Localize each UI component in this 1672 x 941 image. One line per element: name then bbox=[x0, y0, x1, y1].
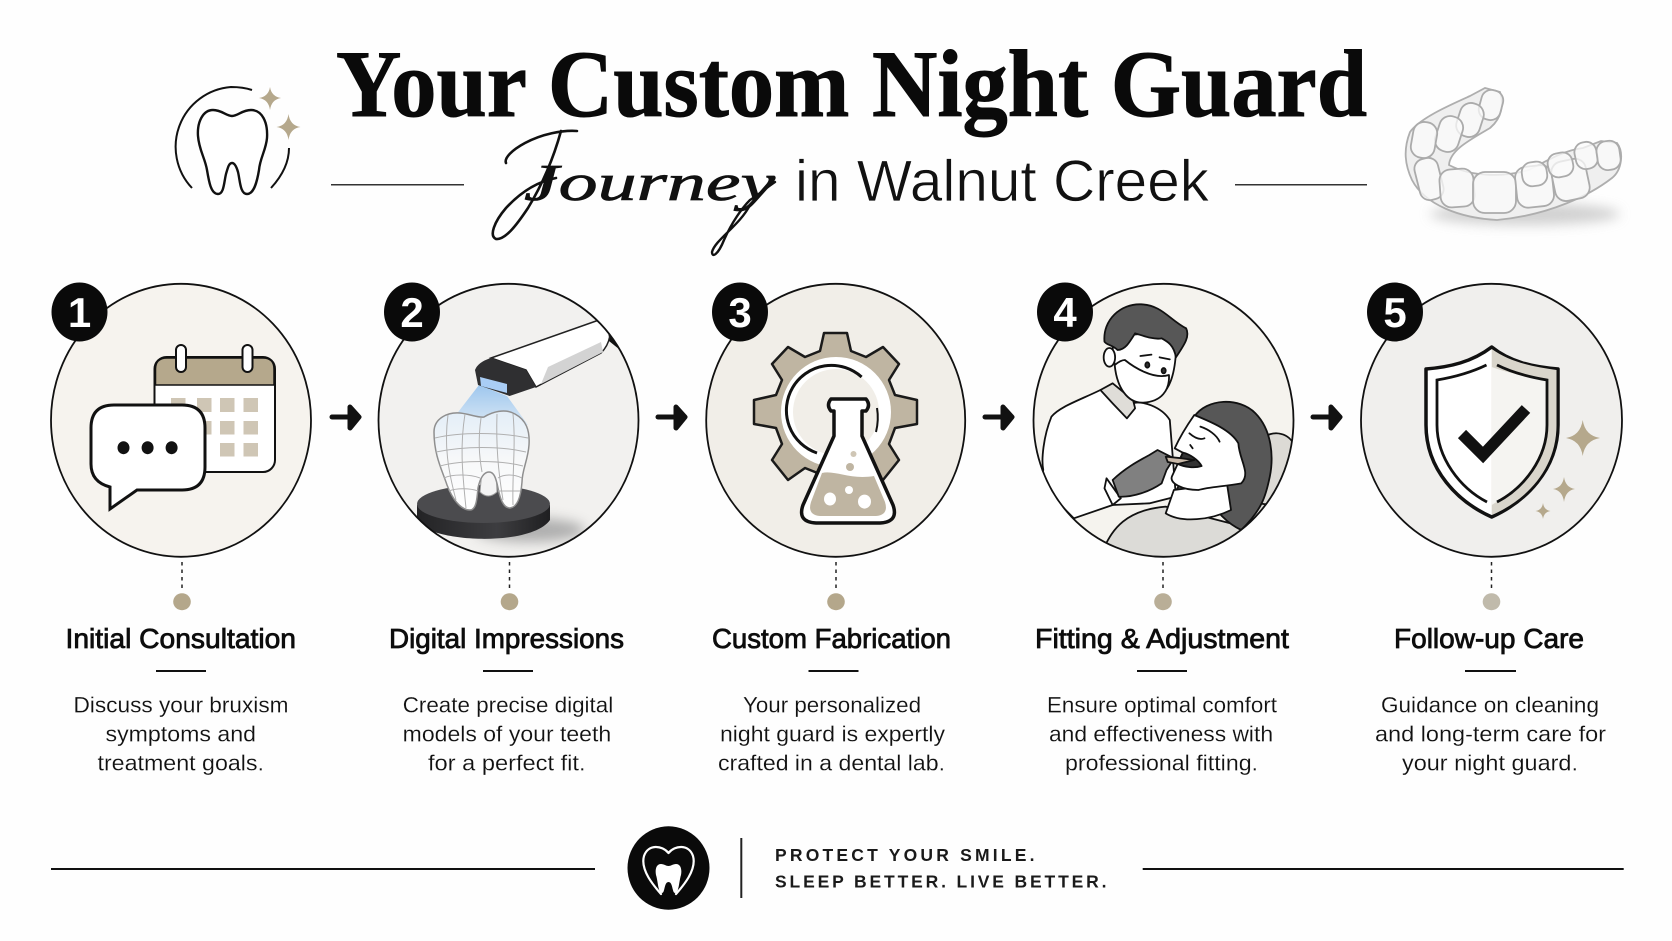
step 4 text bbox=[1035, 623, 1289, 776]
step 4 circle bbox=[1034, 284, 1294, 557]
arrow 3 bbox=[985, 407, 1012, 428]
description: step 3: Your personalized bbox=[743, 692, 921, 717]
description: step 1: Discuss your bruxism bbox=[74, 692, 288, 717]
step 2 text bbox=[389, 623, 624, 776]
step 2 circle outline bbox=[378, 284, 638, 557]
footer tagline bbox=[775, 845, 1106, 891]
step 2 badge: 2 bbox=[400, 289, 424, 336]
description: step 4: and effectiveness with bbox=[1049, 722, 1273, 747]
description: step 2: models of your teeth bbox=[403, 722, 611, 747]
description: step 5: and long-term care for bbox=[1375, 722, 1607, 747]
footer rule right bbox=[1143, 868, 1624, 870]
step 1 text bbox=[66, 623, 296, 776]
step 2 circle bbox=[378, 284, 638, 557]
description: step 5: your night guard. bbox=[1402, 751, 1578, 776]
description: step 4: Ensure optimal comfort bbox=[1047, 692, 1278, 717]
description: step 2 bbox=[403, 692, 613, 776]
step 1 badge: 1 bbox=[68, 289, 91, 336]
step 4 circle outline bbox=[1034, 284, 1294, 557]
step 2 panel bbox=[378, 282, 638, 557]
step 4 badge bbox=[1037, 282, 1093, 342]
description: step 3 bbox=[718, 692, 946, 776]
icon: flask bbox=[802, 399, 894, 523]
description: step 3: night guard is expertly bbox=[720, 722, 946, 747]
description: step 3: crafted in a dental lab. bbox=[718, 751, 945, 776]
subtitle rule left bbox=[331, 184, 464, 186]
description: step 4: professional fitting. bbox=[1065, 751, 1258, 776]
step 3 text bbox=[712, 623, 951, 776]
subtitle: Journey script word: Journey bbox=[524, 155, 776, 212]
icon: sparkles bbox=[1536, 420, 1600, 519]
step 5 text bbox=[1375, 623, 1607, 776]
subtitle: Journey script word bbox=[493, 131, 776, 255]
footer tagline: PROTECT YOUR SMILE. bbox=[775, 845, 1034, 865]
heading: Initial Consultation: Initial Consultation bbox=[66, 623, 296, 654]
icon: speech bubble bbox=[91, 405, 205, 509]
description: step 5 bbox=[1375, 692, 1607, 776]
footer rule left bbox=[51, 868, 595, 870]
heading: Digital Impressions: Digital Impressions bbox=[389, 623, 624, 654]
footer divider bbox=[740, 838, 742, 898]
step 1 badge bbox=[52, 282, 108, 342]
step 3 badge: 3 bbox=[728, 289, 752, 336]
connector dots bbox=[173, 562, 1500, 610]
icon: calendar bbox=[154, 345, 275, 472]
description: step 5: Guidance on cleaning bbox=[1381, 692, 1599, 717]
subtitle: in Walnut Creek: in Walnut Creek bbox=[795, 149, 1210, 214]
footer tagline: SLEEP BETTER. LIVE BETTER. bbox=[775, 871, 1106, 891]
description: step 2: for a perfect fit. bbox=[428, 751, 586, 776]
arrow 2 bbox=[658, 407, 685, 428]
image: clear night guard bbox=[1406, 88, 1622, 225]
step 1 circle bbox=[51, 284, 311, 557]
step 5 circle bbox=[1361, 284, 1622, 557]
title: Your Custom Night Guard bbox=[336, 31, 1367, 137]
step 5 badge: 5 bbox=[1383, 289, 1407, 336]
icon: tooth logo with sparkles bbox=[176, 87, 300, 194]
subtitle rule right bbox=[1235, 184, 1367, 186]
step 4 panel bbox=[1034, 282, 1300, 563]
step 5 panel bbox=[1361, 282, 1622, 557]
icon: gear bbox=[754, 333, 917, 493]
illustration: dentist fitting patient bbox=[1039, 304, 1300, 563]
arrow 1 bbox=[332, 407, 359, 428]
description: step 1: treatment goals. bbox=[98, 751, 264, 776]
step 2 badge bbox=[384, 282, 440, 342]
step 3 circle bbox=[706, 284, 965, 557]
icon: shield with check bbox=[1426, 347, 1558, 517]
description: step 2: Create precise digital bbox=[403, 692, 613, 717]
heading: Custom Fabrication: Custom Fabrication bbox=[712, 623, 951, 654]
step 3 badge bbox=[712, 282, 768, 342]
arrow 4 bbox=[1313, 407, 1340, 428]
description: step 4 bbox=[1047, 692, 1278, 776]
heading: Fitting & Adjustment: Fitting & Adjustment bbox=[1035, 623, 1289, 654]
step 5 badge bbox=[1367, 282, 1423, 342]
icon: 3D scan of tooth bbox=[417, 320, 622, 542]
step 4 badge: 4 bbox=[1053, 289, 1077, 336]
step 1 panel bbox=[51, 282, 311, 557]
description: step 1: symptoms and bbox=[106, 722, 256, 747]
step 3 panel bbox=[706, 282, 965, 557]
footer badge: heart and tooth bbox=[628, 826, 710, 910]
heading: Follow-up Care: Follow-up Care bbox=[1394, 623, 1584, 654]
description: step 1 bbox=[74, 692, 288, 776]
